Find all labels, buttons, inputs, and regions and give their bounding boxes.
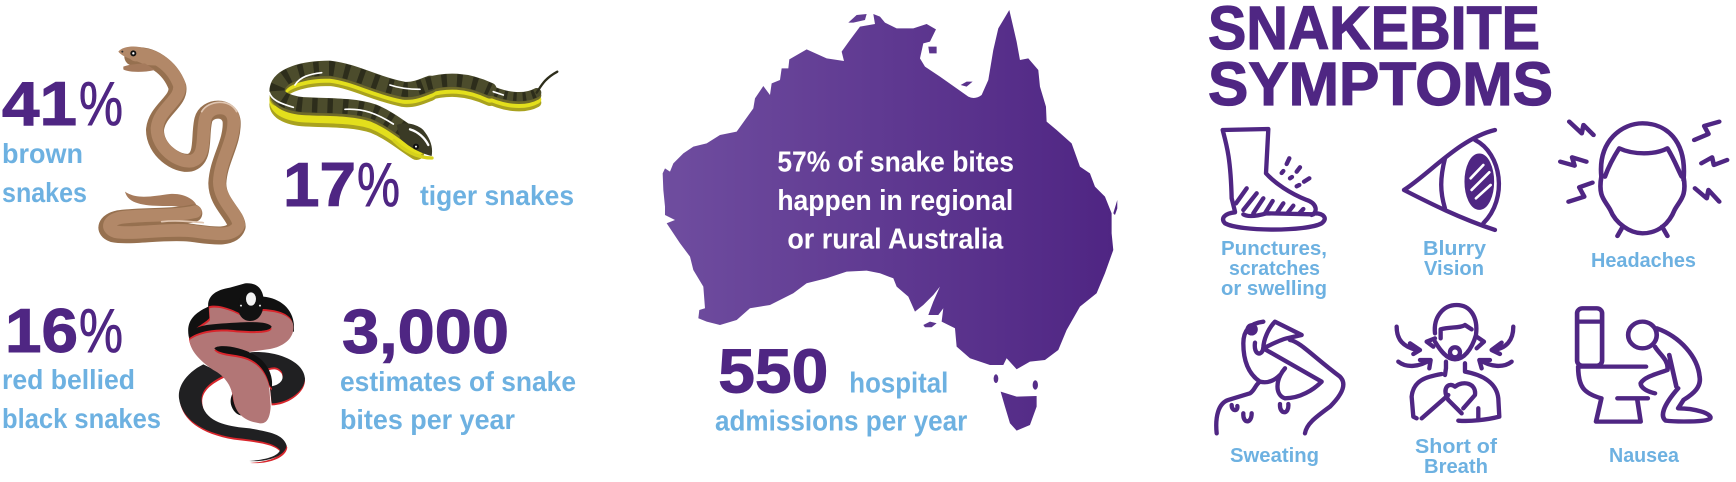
- label: red bellied black snakes: black snakes: [2, 403, 161, 434]
- label: short of breath: [1415, 436, 1497, 478]
- panel: snake species statistics: [2, 46, 576, 463]
- label: red bellied black snakes: [2, 364, 161, 434]
- panel: snakebite symptoms: [1208, 0, 1727, 478]
- label: brown snakes: [2, 138, 87, 208]
- label: blurry vision: Vision: [1424, 258, 1484, 280]
- panel: Australia map and statistics: [663, 10, 1117, 438]
- icon: sweating: [1216, 322, 1343, 433]
- stat: 16%: %: [79, 297, 123, 366]
- icon: nausea at toilet: [1577, 308, 1710, 422]
- label: punctures, scratches or swelling: or swelling: [1221, 278, 1327, 300]
- label: hospital admissions per year: [715, 368, 967, 438]
- label: estimates of snake bites per year: [340, 366, 576, 435]
- label: punctures, scratches or swelling: Punctures,: [1221, 238, 1327, 260]
- label: punctures, scratches or swelling: [1221, 238, 1327, 300]
- label: estimates of snake bites per year: bites per year: [340, 404, 515, 435]
- callout: 57% of snake bites: 57% of snake bites: [777, 147, 1014, 179]
- label: estimates of snake bites per year: estimates of snake: [340, 366, 576, 397]
- stat: 16%: 16: [5, 297, 78, 366]
- label: hospital admissions per year: admissions per year: [715, 406, 967, 438]
- label: short of breath: Breath: [1424, 456, 1488, 478]
- callout: 57% of snake bites: happen in regional: [777, 185, 1013, 217]
- label: blurry vision: [1423, 238, 1487, 280]
- map of Australia: [663, 10, 1117, 431]
- icon: foot with puncture marks: [1223, 129, 1325, 230]
- stat: 17%: 17: [283, 151, 356, 220]
- stat: 550: 550: [718, 338, 828, 407]
- label: red bellied black snakes: red bellied: [2, 364, 135, 395]
- callout: 57% of snake bites: [777, 147, 1014, 255]
- heading: SYMPTOMS: [1208, 50, 1553, 118]
- label: headaches: Headaches: [1591, 250, 1696, 272]
- heading: [1208, 0, 1553, 118]
- illustration: brown snake: [107, 46, 239, 236]
- stat: 41%: %: [79, 70, 123, 139]
- label: short of breath: Short of: [1415, 436, 1497, 458]
- label: sweating: Sweating: [1230, 445, 1319, 467]
- label: brown snakes: brown: [2, 138, 83, 169]
- label: brown snakes: snakes: [2, 177, 87, 208]
- label: tiger snakes: tiger snakes: [420, 180, 574, 211]
- label: nausea: Nausea: [1609, 445, 1680, 467]
- illustration: red bellied black snake: [179, 283, 305, 463]
- label: punctures, scratches or swelling: scratches: [1229, 258, 1320, 280]
- icon: short of breath: [1397, 305, 1513, 421]
- illustration: tiger snake: [269, 68, 557, 158]
- label: blurry vision: Blurry: [1423, 238, 1487, 260]
- icon: blurry eye: [1404, 130, 1499, 230]
- stat: 17%: %: [357, 151, 400, 220]
- label: hospital admissions per year: hospital: [849, 368, 948, 400]
- stat: 41%: 41: [2, 70, 77, 139]
- stat: 3,000: 3,000: [342, 298, 509, 367]
- callout: 57% of snake bites: or rural Australia: [787, 223, 1004, 255]
- icon: headache: [1560, 122, 1727, 236]
